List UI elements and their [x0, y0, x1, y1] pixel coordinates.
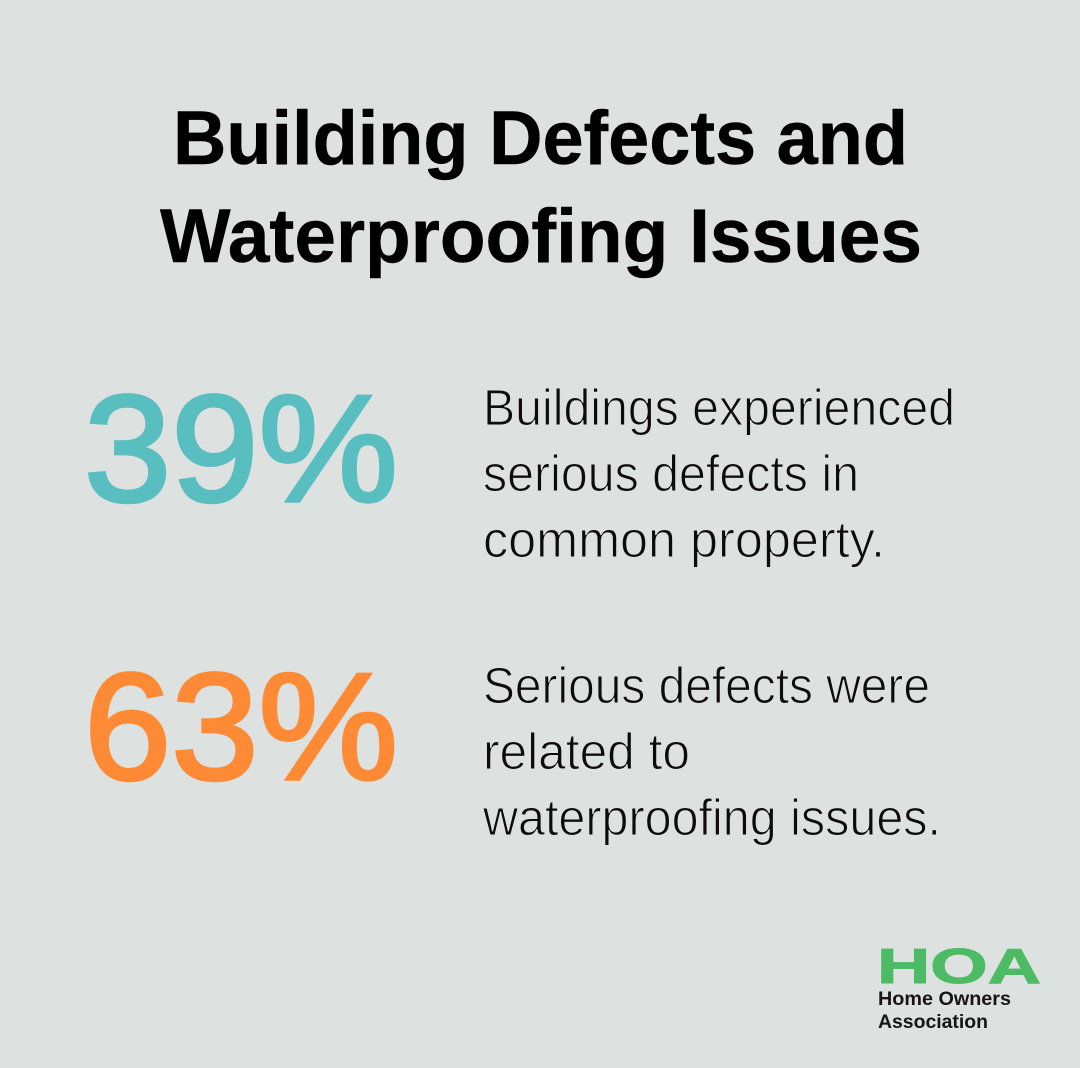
stat: 63 percent	[84, 642, 941, 846]
stat: 39 percent	[84, 364, 955, 568]
stat number: 39%: 39%	[84, 364, 398, 534]
stat description: common property defects: common property.	[483, 511, 885, 568]
logo wordmark: Home Owners	[878, 989, 1011, 1010]
stat description: waterproofing issues: Serious defects were	[483, 657, 930, 714]
stat description: waterproofing issues: waterproofing issues.	[482, 789, 941, 846]
logo mark: HOA: HOA	[877, 940, 1041, 994]
logo wordmark	[878, 989, 1011, 1033]
stat description: common property defects: Buildings experienced	[483, 379, 955, 436]
logo wordmark: Association	[878, 1012, 988, 1033]
title: Waterproofing Issues	[160, 194, 922, 279]
stat description: common property defects: serious defects in	[483, 445, 859, 502]
stat description: waterproofing issues	[482, 657, 941, 846]
logo: HOA Home Owners Association	[877, 940, 1041, 1033]
title	[160, 96, 922, 279]
title: Building Defects and	[173, 96, 908, 181]
stat description: waterproofing issues: related to	[483, 723, 690, 780]
stat number: 63%: 63%	[84, 642, 398, 812]
stat description: common property defects	[483, 379, 955, 568]
